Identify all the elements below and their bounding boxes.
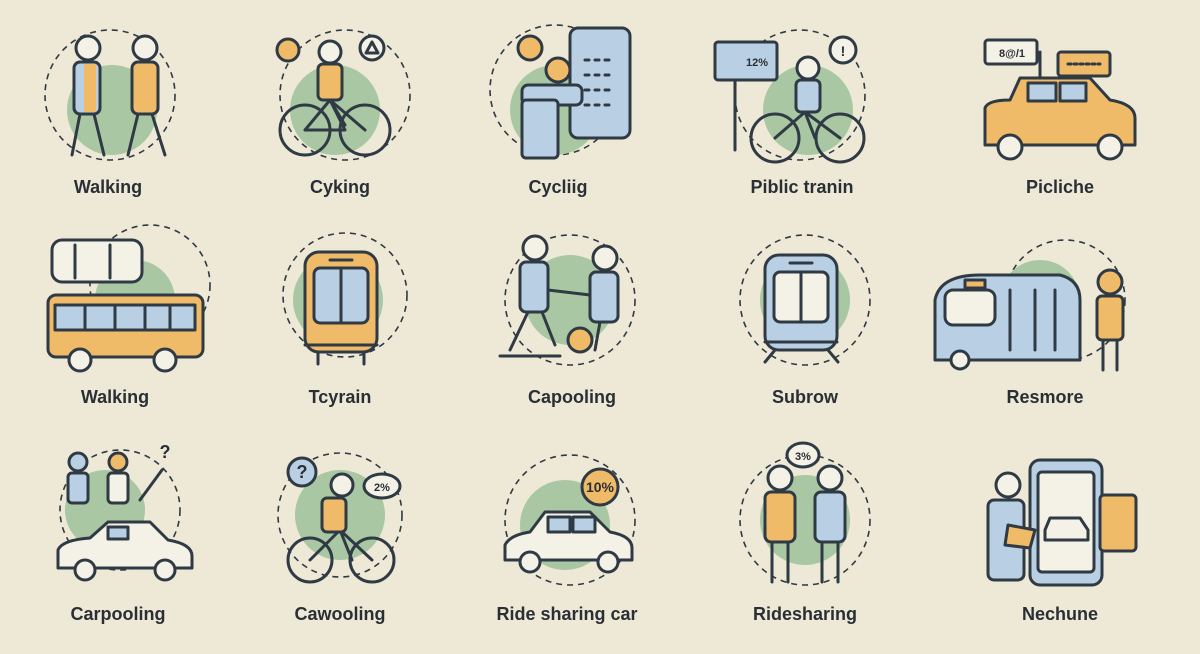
cell: carpooling: [58, 442, 192, 624]
icon: sign and cyclist: 12%: [746, 57, 768, 69]
icon: person at kiosk: [518, 28, 630, 158]
icon: two people talking: [765, 443, 845, 582]
label: Walking: [81, 387, 149, 407]
label: Capooling: [528, 387, 616, 407]
icon: bicycle rider: [277, 36, 390, 155]
cell: public training: [715, 30, 865, 197]
label: Picliche: [1026, 177, 1094, 197]
cell: capooling: [500, 235, 635, 407]
icon: car with signs: 8@/1: [999, 48, 1025, 60]
icon: car with people: ?: [160, 442, 170, 462]
cell: resmore: [935, 240, 1125, 407]
cell: ride sharing car: [496, 455, 638, 624]
label: Ridesharing: [753, 604, 857, 624]
label: Walking: [74, 177, 142, 197]
cell: nechune: [988, 460, 1136, 624]
icon: car with people: [58, 442, 192, 580]
label: Tcyrain: [309, 387, 371, 407]
icon: car with badge: [505, 469, 632, 572]
icon: car with signs: [985, 40, 1135, 159]
label: Ride sharing car: [496, 604, 638, 624]
icon: two people handshake: [500, 236, 618, 356]
cell: tcyrain: [283, 233, 407, 407]
label: Cawooling: [294, 604, 386, 624]
label: Carpooling: [70, 604, 166, 624]
icon: tram front: [305, 252, 377, 364]
cell: cycliig: [490, 25, 630, 197]
cell: walking bus: [48, 225, 210, 407]
cell: subrow: [740, 235, 870, 407]
cell: picliche: [985, 40, 1135, 197]
cell: walking: [45, 30, 175, 197]
icon: cyclist with bubbles: [288, 458, 400, 582]
label: Cycliig: [528, 177, 588, 197]
cell: ridesharing: [740, 443, 870, 624]
label: Resmore: [1006, 387, 1084, 407]
icon: bus and person: [935, 270, 1123, 370]
label: Nechune: [1022, 604, 1098, 624]
icon: phone with app: [988, 460, 1136, 585]
icon: cyclist with bubbles: ?: [296, 462, 308, 482]
icon: subway front: [765, 255, 838, 362]
icon: sign and cyclist: [715, 37, 864, 162]
label: Piblic tranin: [750, 177, 854, 197]
icon: bus and van: [48, 240, 203, 371]
cell: cyking: [277, 30, 410, 197]
icon: two walking people: [72, 36, 165, 155]
icon: car with badge: 10%: [586, 479, 615, 495]
icon: sign and cyclist: !: [841, 43, 845, 59]
label: Cyking: [310, 177, 370, 197]
cell: cawooling: [278, 453, 402, 624]
icon: cyclist with bubbles: 2%: [374, 482, 390, 494]
icon: two people talking: 3%: [795, 451, 811, 463]
label: Subrow: [772, 387, 839, 407]
